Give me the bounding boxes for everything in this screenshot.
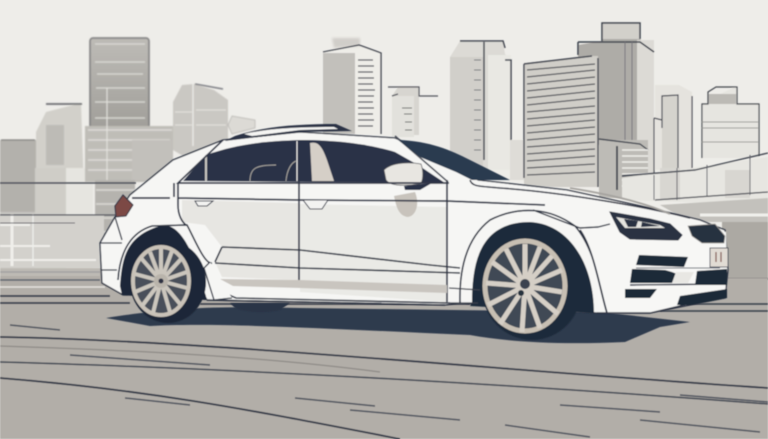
road surface: [0, 268, 768, 439]
elevated road at right: [622, 153, 768, 279]
headlight: [610, 212, 682, 240]
left railing and road barrier: [0, 183, 136, 268]
windshield: [398, 140, 510, 180]
body crease lines: [132, 140, 545, 302]
license plate: [710, 248, 728, 267]
hood line: [470, 180, 690, 218]
roof rail: [225, 124, 352, 141]
side window: [183, 140, 445, 183]
front bumper: [533, 210, 727, 313]
a-pillar edge: [395, 136, 448, 182]
tail light: [115, 195, 133, 217]
shaded door panels: [182, 200, 298, 280]
door handles: [195, 200, 328, 209]
underbody: [230, 303, 290, 312]
upper grille: [688, 224, 725, 243]
front fender and arch: [449, 210, 607, 313]
city skyline, right: [323, 22, 759, 200]
car body: [100, 132, 728, 313]
door sill lines: [207, 247, 460, 305]
rear wheel: [130, 241, 206, 323]
car: [100, 124, 728, 340]
sill band: [220, 279, 447, 293]
rear wheel arch: [100, 217, 232, 300]
lower air vents: [625, 255, 727, 305]
front wheel: [482, 236, 582, 340]
city skyline, left: [0, 38, 255, 268]
car ground shadow: [106, 307, 690, 343]
wing mirror: [384, 163, 432, 217]
front door panel: [300, 204, 447, 302]
